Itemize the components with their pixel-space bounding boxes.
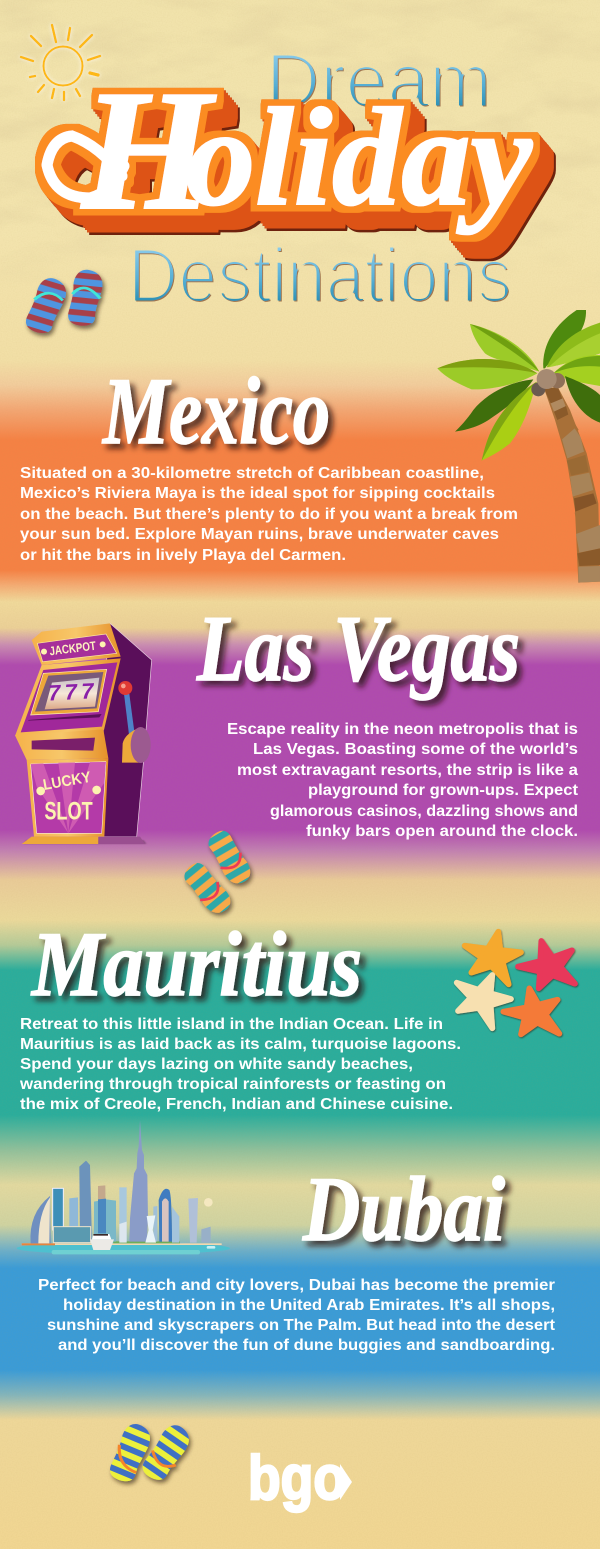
panel: Mauritius: [19, 913, 461, 1113]
Burj Al Arab and hotel: [30, 1188, 91, 1243]
boat: [90, 1234, 114, 1250]
text block: Mauritius: wandering through tropical rainforests or feasting on: [19, 1076, 446, 1093]
illustration: Dubai skyline: [17, 1120, 230, 1254]
text block: Dubai: Perfect for beach and city lovers, Dubai has become the premier: [38, 1277, 555, 1294]
text block: Las Vegas: [227, 721, 578, 840]
text block: Mexico: Situated on a 30-kilometre stretch of Caribbean coastline,: [20, 465, 484, 482]
text block: Mauritius: [19, 1016, 461, 1113]
text block: Las Vegas: glamorous casinos, dazzling shows and: [270, 803, 578, 820]
lucky slot door: LUCKY: [42, 769, 92, 794]
title line: Holiday: [47, 56, 533, 246]
panel: Dubai: [38, 1158, 555, 1354]
text block: Mexico: your sun bed. Explore Mayan ruins, brave underwater caves: [20, 526, 499, 543]
icon: teal and orange flip-flops: [179, 827, 255, 918]
heading: Mauritius: Mauritius: [30, 913, 362, 1015]
icon: blue and red flip-flops: [23, 268, 105, 337]
text block: Mexico: on the beach. But there’s plenty to do if you want a break from: [20, 506, 518, 523]
title line: Holiday: H: [80, 56, 217, 246]
text block: Mauritius: the mix of Creole, French, Indian and Chinese cuisine.: [20, 1096, 453, 1113]
text block: Mexico: [20, 465, 518, 564]
illustration: slot machine: [15, 623, 152, 844]
text block: Mauritius: Mauritius is as laid back as its calm, turquoise lagoons.: [20, 1036, 461, 1053]
text block: Dubai: holiday destination in the United Arab Emirates. It’s all shops,: [63, 1297, 555, 1314]
text block: Dubai: and you’ll discover the fun of dune buggies and sandboarding.: [58, 1337, 555, 1354]
title: [47, 38, 533, 319]
coin ledge: [15, 729, 108, 760]
text block: Mexico: or hit the bars in lively Playa del Carmen.: [20, 547, 346, 564]
reel panel: 777: [48, 678, 96, 706]
text block: Las Vegas: Escape reality in the neon metropolis that is: [227, 721, 578, 738]
water: [17, 1241, 230, 1254]
palm trunk: [544, 387, 600, 583]
text block: Las Vegas: playground for grown-ups. Expect: [308, 782, 578, 799]
panel: Mexico: [20, 358, 518, 564]
text block: Mauritius: Spend your days lazing on white sandy beaches,: [20, 1056, 413, 1073]
icon: blue and yellow flip-flops: [107, 1420, 195, 1485]
lucky slot door: [27, 758, 108, 837]
jackpot sign: [32, 623, 121, 665]
reel panel: [15, 658, 121, 736]
title line: Destinations: Destinations: [128, 233, 512, 319]
text block: Dubai: [38, 1277, 555, 1354]
base: [22, 837, 145, 844]
jackpot sign: JACKPOT: [49, 639, 97, 658]
title line: Holiday: oliday: [186, 80, 533, 235]
illustration: palm tree: [437, 310, 600, 583]
text block: Dubai: sunshine and skyscrapers on The Palm. But head into the desert: [47, 1317, 555, 1334]
pale sun: [204, 1198, 213, 1207]
title line: Dream: Dream: [266, 38, 492, 124]
heading: Dubai: Dubai: [302, 1158, 505, 1260]
palm fronds: [437, 310, 600, 461]
icon: starfish group: [457, 932, 575, 1034]
text block: Mexico: Mexico’s Riviera Maya is the ideal spot for sipping cocktails: [20, 485, 495, 502]
coconuts: [531, 369, 565, 396]
logo: bgo: bgo: [248, 1444, 346, 1513]
lever: [118, 681, 151, 763]
icon: sun: [21, 25, 100, 100]
text block: Las Vegas: funky bars open around the clock.: [306, 823, 578, 840]
text block: Las Vegas: Las Vegas. Boasting some of the world’s: [253, 741, 578, 758]
heading: Mexico: Mexico: [101, 358, 330, 464]
cabinet side: [98, 623, 152, 837]
skyscrapers: [69, 1120, 211, 1243]
text block: Mauritius: Retreat to this little island in the Indian Ocean. Life in: [20, 1016, 443, 1033]
text block: Las Vegas: most extravagant resorts, the strip is like a: [237, 762, 578, 779]
panel: Las Vegas: [196, 597, 578, 840]
heading: Las Vegas: Las Vegas: [196, 597, 520, 701]
lucky slot door: SLOT: [44, 797, 93, 825]
